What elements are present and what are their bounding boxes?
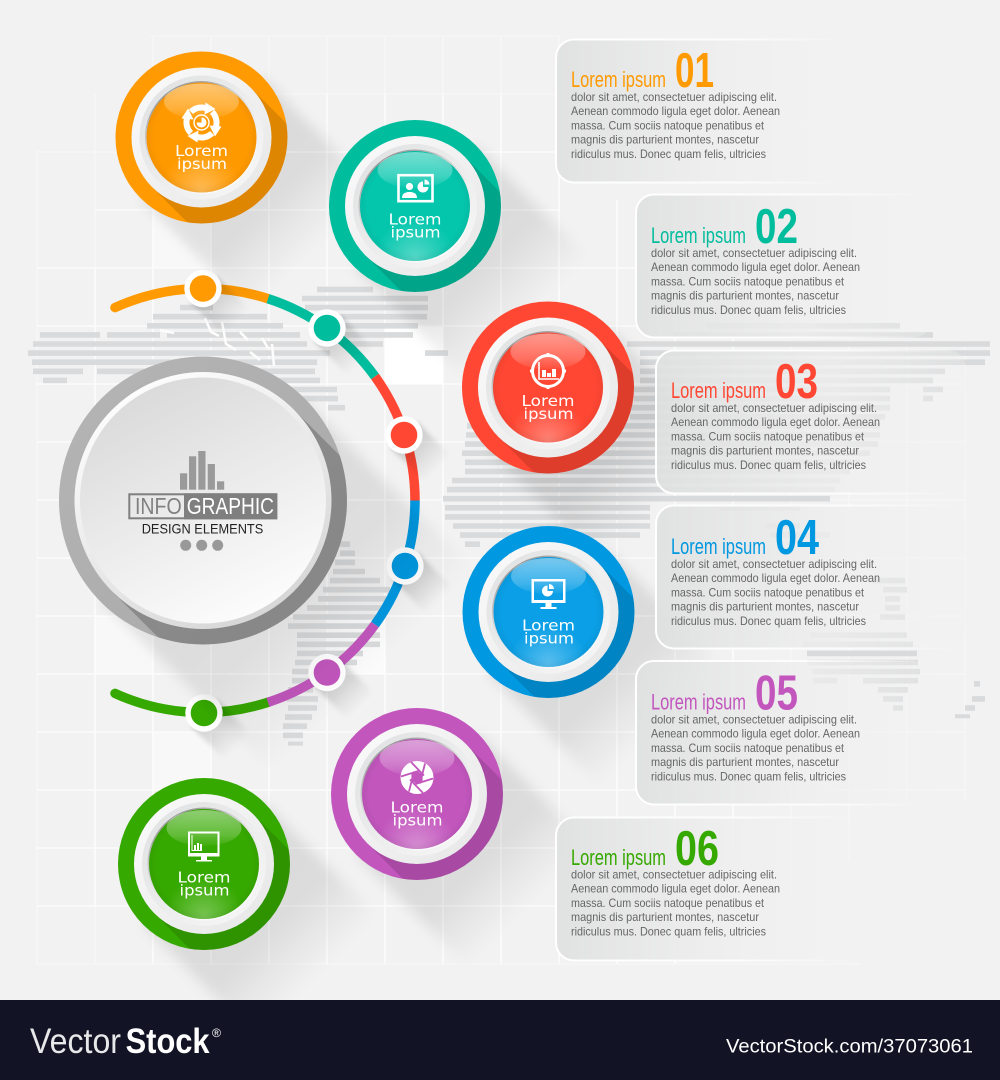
body text: dolor sit amet, consectetuer adipiscing elit. bbox=[651, 246, 857, 260]
heading 04 bbox=[671, 511, 819, 565]
icon: bar chart bbox=[180, 451, 224, 490]
button 2: teal bbox=[329, 120, 527, 318]
body text bbox=[571, 90, 780, 161]
label: ipsum bbox=[390, 224, 441, 242]
button 6: green bbox=[118, 778, 316, 976]
body text bbox=[671, 557, 880, 628]
card 3 bbox=[656, 350, 966, 494]
label: ipsum bbox=[392, 812, 443, 830]
label: Lorem bbox=[388, 210, 442, 228]
body text: massa. Cum sociis natoque penatibus et bbox=[651, 741, 845, 755]
heading 03: Lorem ipsum bbox=[671, 378, 766, 403]
body text: dolor sit amet, consectetuer adipiscing elit. bbox=[571, 868, 777, 882]
body text: dolor sit amet, consectetuer adipiscing elit. bbox=[571, 90, 777, 104]
body text: magnis dis parturient montes, nascetur bbox=[651, 289, 839, 303]
label: ipsum bbox=[177, 155, 227, 173]
label: Lorem bbox=[522, 392, 574, 410]
label bbox=[175, 142, 228, 173]
footer logo: Stock bbox=[126, 1022, 210, 1061]
footer logo: ® bbox=[212, 1026, 221, 1040]
body text: magnis dis parturient montes, nascetur bbox=[571, 133, 759, 147]
icon: aperture bbox=[400, 761, 434, 794]
footer bar bbox=[0, 1000, 1000, 1080]
footer url: VectorStock.com/37073061 bbox=[726, 1036, 973, 1058]
label bbox=[390, 798, 444, 830]
heading 01: Lorem ipsum bbox=[571, 67, 666, 92]
icon: monitor with pie bbox=[532, 579, 566, 609]
body text: Aenean commodo ligula eget dolor. Aenean bbox=[651, 260, 860, 274]
button 1: orange bbox=[116, 52, 314, 250]
background grid bbox=[37, 36, 965, 964]
body text: massa. Cum sociis natoque penatibus et bbox=[571, 118, 765, 132]
body text: Aenean commodo ligula eget dolor. Aenean bbox=[571, 882, 780, 896]
body text: Aenean commodo ligula eget dolor. Aenean bbox=[671, 571, 880, 585]
heading 03 bbox=[671, 355, 818, 409]
card 4 bbox=[656, 506, 966, 648]
body text: magnis dis parturient montes, nascetur bbox=[571, 910, 759, 924]
label: ipsum bbox=[524, 405, 574, 423]
label: Lorem bbox=[390, 798, 444, 816]
node: red bbox=[385, 416, 438, 469]
body text: Aenean commodo ligula eget dolor. Aenean bbox=[651, 727, 860, 741]
body text: ridiculus mus. Donec quam felis, ultricies bbox=[571, 147, 766, 161]
label: Lorem bbox=[178, 868, 230, 886]
heading 02: 02 bbox=[755, 200, 798, 254]
heading 05: Lorem ipsum bbox=[651, 690, 746, 714]
body text: dolor sit amet, consectetuer adipiscing elit. bbox=[671, 557, 877, 571]
body text: ridiculus mus. Donec quam felis, ultricies bbox=[671, 458, 866, 472]
heading 03: 03 bbox=[775, 355, 818, 409]
label: Lorem bbox=[175, 142, 228, 160]
node: teal bbox=[308, 309, 361, 362]
heading 02: Lorem ipsum bbox=[651, 223, 746, 248]
heading 02 bbox=[651, 200, 798, 254]
icon: monitor with chart bbox=[188, 832, 220, 862]
heading 06: 06 bbox=[675, 822, 719, 876]
body text: Aenean commodo ligula eget dolor. Aenean bbox=[571, 104, 780, 118]
card 1 bbox=[556, 40, 851, 182]
body text: massa. Cum sociis natoque penatibus et bbox=[571, 896, 765, 910]
label: Lorem bbox=[522, 616, 575, 634]
body text bbox=[671, 401, 880, 472]
body text: ridiculus mus. Donec quam felis, ultricies bbox=[571, 924, 766, 938]
arc connector bbox=[115, 288, 415, 713]
button 4: blue bbox=[462, 526, 660, 724]
body text: ridiculus mus. Donec quam felis, ultricies bbox=[671, 614, 866, 628]
node: orange bbox=[184, 270, 237, 322]
icon: presentation bbox=[398, 175, 432, 201]
heading 01: 01 bbox=[675, 44, 714, 98]
logo: infographic: GRAPHIC bbox=[187, 493, 274, 519]
label: ipsum bbox=[180, 882, 230, 900]
body text: ridiculus mus. Donec quam felis, ultricies bbox=[651, 769, 846, 783]
body text: dolor sit amet, consectetuer adipiscing elit. bbox=[671, 401, 877, 415]
body text: ridiculus mus. Donec quam felis, ultricies bbox=[651, 303, 846, 317]
body text: dolor sit amet, consectetuer adipiscing elit. bbox=[651, 712, 857, 726]
subtitle: DESIGN ELEMENTS bbox=[142, 520, 263, 536]
footer logo bbox=[30, 1022, 221, 1061]
dots bbox=[180, 540, 223, 551]
body text: massa. Cum sociis natoque penatibus et bbox=[651, 274, 845, 288]
heading 05 bbox=[651, 666, 798, 720]
logo: infographic bbox=[129, 493, 277, 519]
icon: target chart bbox=[530, 353, 566, 389]
body text: magnis dis parturient montes, nascetur bbox=[671, 444, 859, 458]
logo: infographic: INFO bbox=[135, 493, 182, 519]
body text: Aenean commodo ligula eget dolor. Aenean bbox=[671, 415, 880, 429]
body text: magnis dis parturient montes, nascetur bbox=[671, 600, 859, 614]
heading 01 bbox=[571, 44, 714, 98]
heading 05: 05 bbox=[755, 666, 798, 720]
heading 04: 04 bbox=[775, 511, 819, 565]
heading 04: Lorem ipsum bbox=[671, 534, 766, 559]
node: purple bbox=[308, 654, 361, 706]
heading 06 bbox=[571, 822, 719, 876]
label bbox=[388, 210, 442, 242]
label: ipsum bbox=[524, 630, 574, 648]
label bbox=[522, 616, 575, 648]
body text: massa. Cum sociis natoque penatibus et bbox=[671, 429, 865, 443]
label bbox=[522, 392, 574, 423]
central circle bbox=[59, 356, 373, 670]
heading 06: Lorem ipsum bbox=[571, 845, 666, 870]
striped world map bbox=[28, 287, 990, 746]
button 5: purple bbox=[331, 708, 529, 906]
label bbox=[178, 868, 230, 900]
node: green bbox=[185, 694, 238, 747]
body text bbox=[651, 246, 860, 317]
body text: magnis dis parturient montes, nascetur bbox=[651, 755, 839, 769]
icon: cycle arrows bbox=[182, 102, 222, 142]
card 2 bbox=[636, 194, 931, 338]
body text bbox=[651, 712, 860, 783]
card 6 bbox=[556, 818, 861, 960]
button 3: red bbox=[462, 302, 660, 500]
body text bbox=[571, 868, 780, 938]
card 5 bbox=[636, 661, 931, 804]
footer logo: Vector bbox=[30, 1022, 121, 1061]
body text: massa. Cum sociis natoque penatibus et bbox=[671, 585, 865, 599]
node: blue bbox=[386, 547, 439, 600]
